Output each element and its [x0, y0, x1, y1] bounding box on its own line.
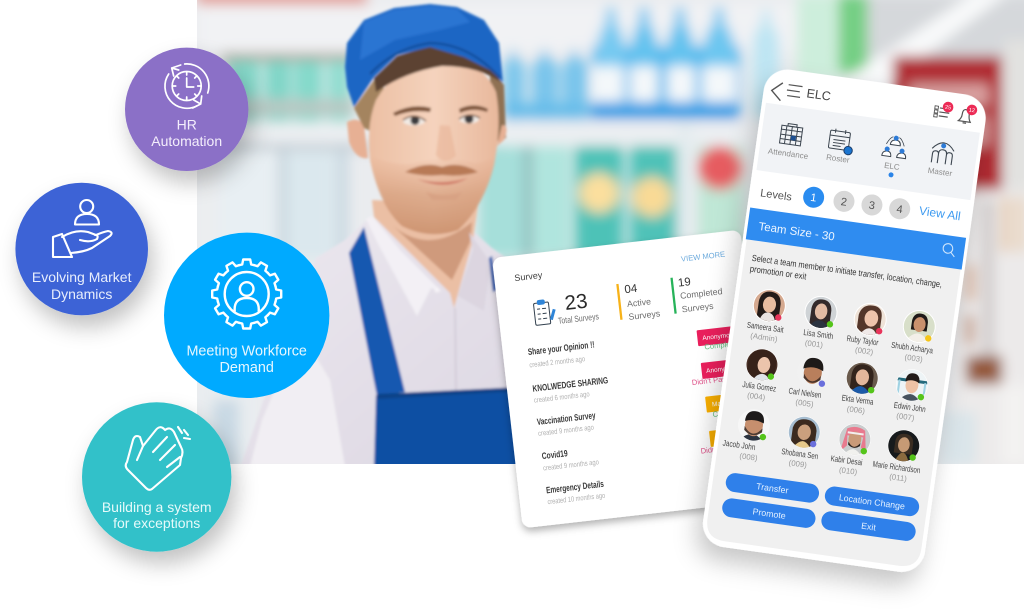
status tags: Anonymous [706, 364, 741, 375]
button: Location Change: Location Change [838, 492, 906, 511]
team member: Lisa Smith: Lisa Smith [803, 327, 834, 341]
team member: Shobana Sen: (009) [788, 458, 808, 470]
icon: clipboard checklist [533, 299, 556, 325]
stat: 04 active surveys: 04 [624, 283, 638, 296]
team member: Sameera Sait: (Admin) [750, 331, 778, 344]
status tags: Anonymous [702, 331, 738, 342]
team member: Kabir Desai: Kabir Desai [830, 453, 863, 467]
survey list: created 2 months ago [529, 354, 585, 369]
nav: attendance [767, 121, 813, 161]
team member: Kabir Desai [830, 424, 871, 476]
heading: Survey: Survey [514, 270, 543, 283]
team member: Julia Gomez: Julia Gomez [742, 379, 777, 394]
team member: Marie Richardson: (011) [889, 472, 908, 483]
panel: survey card [492, 230, 771, 528]
stat: 04 active surveys: Active [627, 296, 652, 309]
circle: Meeting Workforce Demand [164, 233, 329, 398]
status tags: Mandatory [712, 398, 744, 409]
icon: gear with person [212, 260, 281, 328]
team member: Julia Gomez [742, 349, 778, 402]
apron straps [349, 227, 405, 396]
stat: 23 total surveys: Total Surveys [557, 311, 600, 326]
icon: task list with badge [934, 100, 954, 119]
stat: 19 completed surveys: Surveys [681, 301, 715, 314]
icon: bell with badge: 12 [968, 108, 975, 114]
team member: Jacob John: (008) [739, 451, 759, 463]
team member: Shobana Sen [782, 416, 820, 470]
survey list: Covid19 [541, 448, 568, 461]
team member: Shobana Sen: Shobana Sen [781, 446, 819, 461]
text: Building a system for exceptions: for exceptions [113, 515, 200, 531]
text: HR Automation: Automation [151, 133, 222, 149]
team member: Edwin John [894, 370, 928, 422]
levels selector: Levels [759, 187, 793, 204]
icon: person over open hand [53, 200, 112, 257]
panel: phone ELC screen [700, 66, 989, 575]
team member: Carl Nielsen: (005) [795, 398, 815, 409]
lower screen background [705, 239, 961, 568]
team member: Kabir Desai: (010) [838, 465, 858, 477]
status tags: Didn't Participate [700, 440, 758, 456]
button: Transfer [725, 472, 820, 504]
text: Meeting Workforce Demand: Demand [219, 360, 274, 376]
collar [368, 219, 436, 314]
eyes and brows [393, 106, 431, 116]
lower right background [940, 190, 1024, 480]
status tags: Mandatory [716, 432, 748, 443]
levels selector: 1 [810, 192, 817, 205]
survey list: Emergency Details [546, 479, 604, 495]
photo: store worker in front of blurred shelves [197, 0, 1024, 480]
icon: clock with circular arrows [165, 64, 209, 108]
status tags: Didn't Participate [691, 372, 749, 387]
text: Evolving Market Dynamics: Dynamics [51, 286, 112, 302]
status tags: Completed [704, 338, 741, 351]
survey list: created 9 months ago [538, 423, 594, 438]
team member: Shubh Acharya [891, 310, 936, 364]
team member: Jacob John [722, 411, 766, 462]
team member: Lisa Smith: (001) [804, 338, 824, 350]
team member: Carl Nielsen: Carl Nielsen [788, 386, 822, 400]
header: back, menu, ELC [770, 81, 832, 108]
nav: ELC active [879, 134, 909, 179]
button: Promote: Promote [752, 506, 786, 521]
circle: Evolving Market Dynamics [15, 183, 148, 315]
nav: ELC active: ELC [884, 161, 900, 172]
team member: Lisa Smith [804, 296, 838, 350]
circle: Building a system for exceptions [82, 402, 231, 552]
lower shelf boxes [478, 122, 743, 259]
status tags: Completed [712, 406, 750, 419]
icon: task list with badge: 25 [945, 105, 951, 111]
team member: Ekta Verma: (006) [846, 404, 866, 416]
levels selector [759, 179, 962, 228]
survey list: KNOLWEDGE SHARING [532, 375, 609, 394]
team member: Jacob John: Jacob John [722, 438, 756, 452]
button: Exit [820, 510, 917, 542]
status tags [686, 324, 763, 456]
team member: Ekta Verma: Ekta Verma [841, 392, 874, 407]
team member: Ekta Verma [842, 362, 878, 416]
team member: Shubh Acharya: Shubh Acharya [891, 340, 934, 355]
team member: Edwin John: (007) [896, 411, 915, 423]
stat: 19 completed surveys: Completed [680, 286, 723, 301]
cap [345, 4, 503, 107]
team member: Ruby Taylor: Ruby Taylor [846, 333, 879, 347]
team member: Sameera Sait: Sameera Sait [746, 320, 785, 335]
team member: Shubh Acharya: (003) [904, 353, 924, 364]
worker [240, 4, 525, 468]
survey list: Share your Opinion !! [527, 339, 595, 357]
text: Meeting Workforce Demand: Meeting Workforce [186, 344, 307, 360]
survey list [527, 338, 621, 507]
ears and hair [347, 120, 368, 158]
nav: attendance: Attendance [767, 147, 809, 161]
icon: bell with badge [958, 103, 978, 125]
nav panel background [756, 103, 980, 200]
nose [436, 125, 456, 161]
link: view more: VIEW MORE [681, 250, 726, 264]
stat: 04 active surveys [616, 279, 661, 323]
nav: roster: Roster [826, 153, 850, 165]
icon: clapping hands [126, 427, 190, 490]
team member: Ruby Taylor: (002) [854, 345, 874, 357]
stat: 19 completed surveys: 19 [677, 276, 691, 290]
text: HR Automation: HR [177, 116, 197, 132]
levels selector: 4 [896, 203, 903, 216]
team member: Ruby Taylor [846, 303, 886, 356]
instruction text: Select a team member to initiate transfer, location, change, [751, 253, 943, 289]
nav: master: Master [927, 166, 953, 178]
levels selector: View All [918, 204, 962, 223]
levels selector: 3 [868, 200, 876, 212]
button: Transfer: Transfer [756, 481, 789, 496]
survey list: created 10 months ago [547, 491, 606, 506]
levels selector: 2 [840, 196, 848, 209]
blue bottles [503, 8, 779, 120]
team member: Marie Richardson [872, 430, 920, 483]
circle: HR Automation [125, 48, 248, 171]
header: back, menu, ELC: ELC [806, 86, 832, 104]
button: Promote [721, 497, 817, 529]
team member: Sameera Sait [747, 289, 786, 344]
text: Building a system for exceptions: Building a system [102, 499, 212, 515]
face [368, 64, 500, 208]
button: Exit: Exit [861, 521, 877, 533]
instruction text: promotion or exit [749, 264, 807, 282]
nav: master [927, 141, 957, 178]
under cap shadow and hair [374, 46, 503, 92]
stat: 23 total surveys [555, 288, 600, 326]
survey list: created 6 months ago [533, 389, 590, 405]
neck [372, 200, 478, 308]
team member: Julia Gomez: (004) [747, 391, 766, 402]
survey list: Vaccination Survey [536, 410, 597, 427]
team size bar: Team Size - 30 [758, 221, 835, 244]
survey list: created 9 months ago [543, 457, 599, 473]
team member: Carl Nielsen [788, 358, 826, 408]
shirt [243, 225, 507, 464]
team member: Edwin John: Edwin John [893, 400, 927, 414]
apron bib [372, 390, 516, 464]
team size bar [746, 208, 966, 270]
stat: 19 completed surveys [670, 272, 725, 315]
nav: roster [826, 128, 855, 165]
team member: Marie Richardson: Marie Richardson [872, 459, 921, 475]
teal bottles [222, 53, 362, 122]
stat: 23 total surveys: 23 [564, 290, 589, 315]
text: Evolving Market Dynamics: Evolving Market [32, 269, 131, 285]
stat: 04 active surveys: Surveys [628, 308, 661, 322]
button: Location Change [824, 485, 920, 517]
